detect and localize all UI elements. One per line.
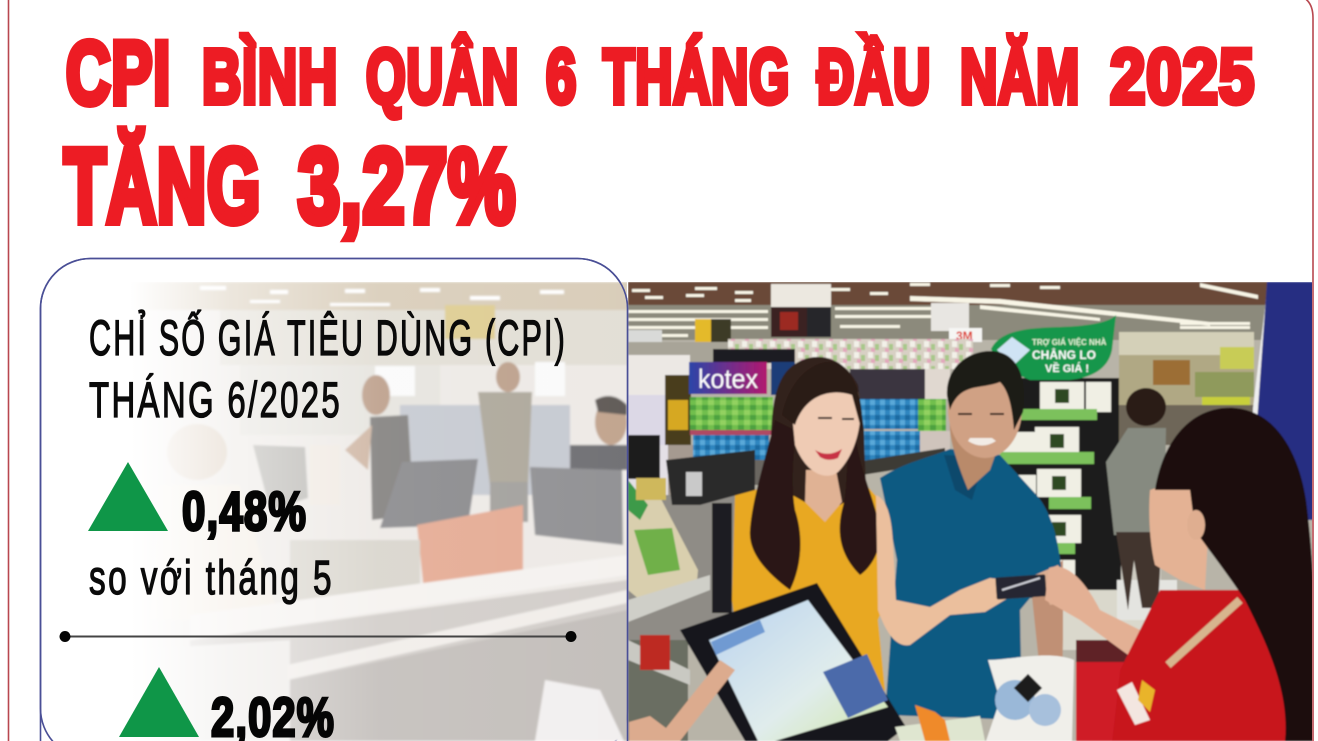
store signage (689, 282, 1318, 520)
faded man in tank top (345, 375, 414, 520)
payment card and hands (994, 564, 1060, 606)
card reader pole (666, 450, 755, 613)
man in blue polo (880, 351, 1063, 720)
POS monitor (680, 583, 906, 741)
blue banner (1251, 304, 1266, 416)
divider (60, 631, 576, 642)
stat: month on month (88, 462, 334, 605)
store background: 3M (956, 329, 973, 343)
icon: up triangle (119, 667, 199, 737)
title line 1: 2025 (1110, 34, 1255, 120)
faded supermarket photo (130, 282, 628, 741)
caption: so với tháng 5 (89, 552, 334, 605)
products at counter (629, 656, 1074, 741)
title (64, 22, 1255, 245)
title line 1: NĂM (960, 34, 1080, 120)
shopper in background (1106, 388, 1166, 610)
title line 2: TĂNG (64, 128, 261, 245)
title line 1 (66, 22, 1255, 122)
woman in yellow dress (732, 357, 1008, 705)
store background (628, 282, 1314, 741)
title line 2 (64, 128, 516, 245)
panel heading: THÁNG 6/2025 (89, 372, 342, 428)
title line 1: QUÂN (366, 33, 519, 120)
title line 1: CPI (66, 22, 171, 122)
title line 1: BÌNH (202, 34, 338, 120)
info panel (40, 258, 628, 741)
stat: second value (119, 667, 335, 741)
sign: green promotion: TRỢ GIÁ VIỆC NHÀ (1032, 338, 1107, 347)
sign: green promotion: CHẲNG LO (1032, 347, 1096, 362)
panel heading: CHỈ SỐ GIÁ TIÊU DÙNG (CPI) (89, 309, 567, 366)
title line 1: 6 (546, 34, 577, 120)
value 0,48%: 0,48% (182, 480, 307, 542)
cart and bag (628, 478, 710, 685)
sign: green promotion: VỀ GIÁ ! (1045, 362, 1089, 375)
faded boy (570, 396, 628, 470)
panel heading (89, 309, 567, 428)
faded cashier (174, 424, 227, 480)
cashier in red uniform (1045, 408, 1318, 741)
title line 1: ĐẦU (817, 33, 931, 120)
faded man with phone (478, 362, 532, 522)
panel border (40, 258, 628, 741)
panel background (40, 258, 628, 741)
faded promo box (416, 504, 524, 584)
faded monitors (253, 445, 623, 545)
sign: green promotion (991, 315, 1116, 380)
title line 2: 3,27% (298, 128, 516, 245)
icon: up triangle (88, 462, 168, 531)
title line 1: THÁNG (603, 33, 790, 120)
sign: kotex: kotex (698, 364, 758, 394)
sign: kotex (689, 362, 795, 395)
supermarket photo (628, 282, 1318, 741)
